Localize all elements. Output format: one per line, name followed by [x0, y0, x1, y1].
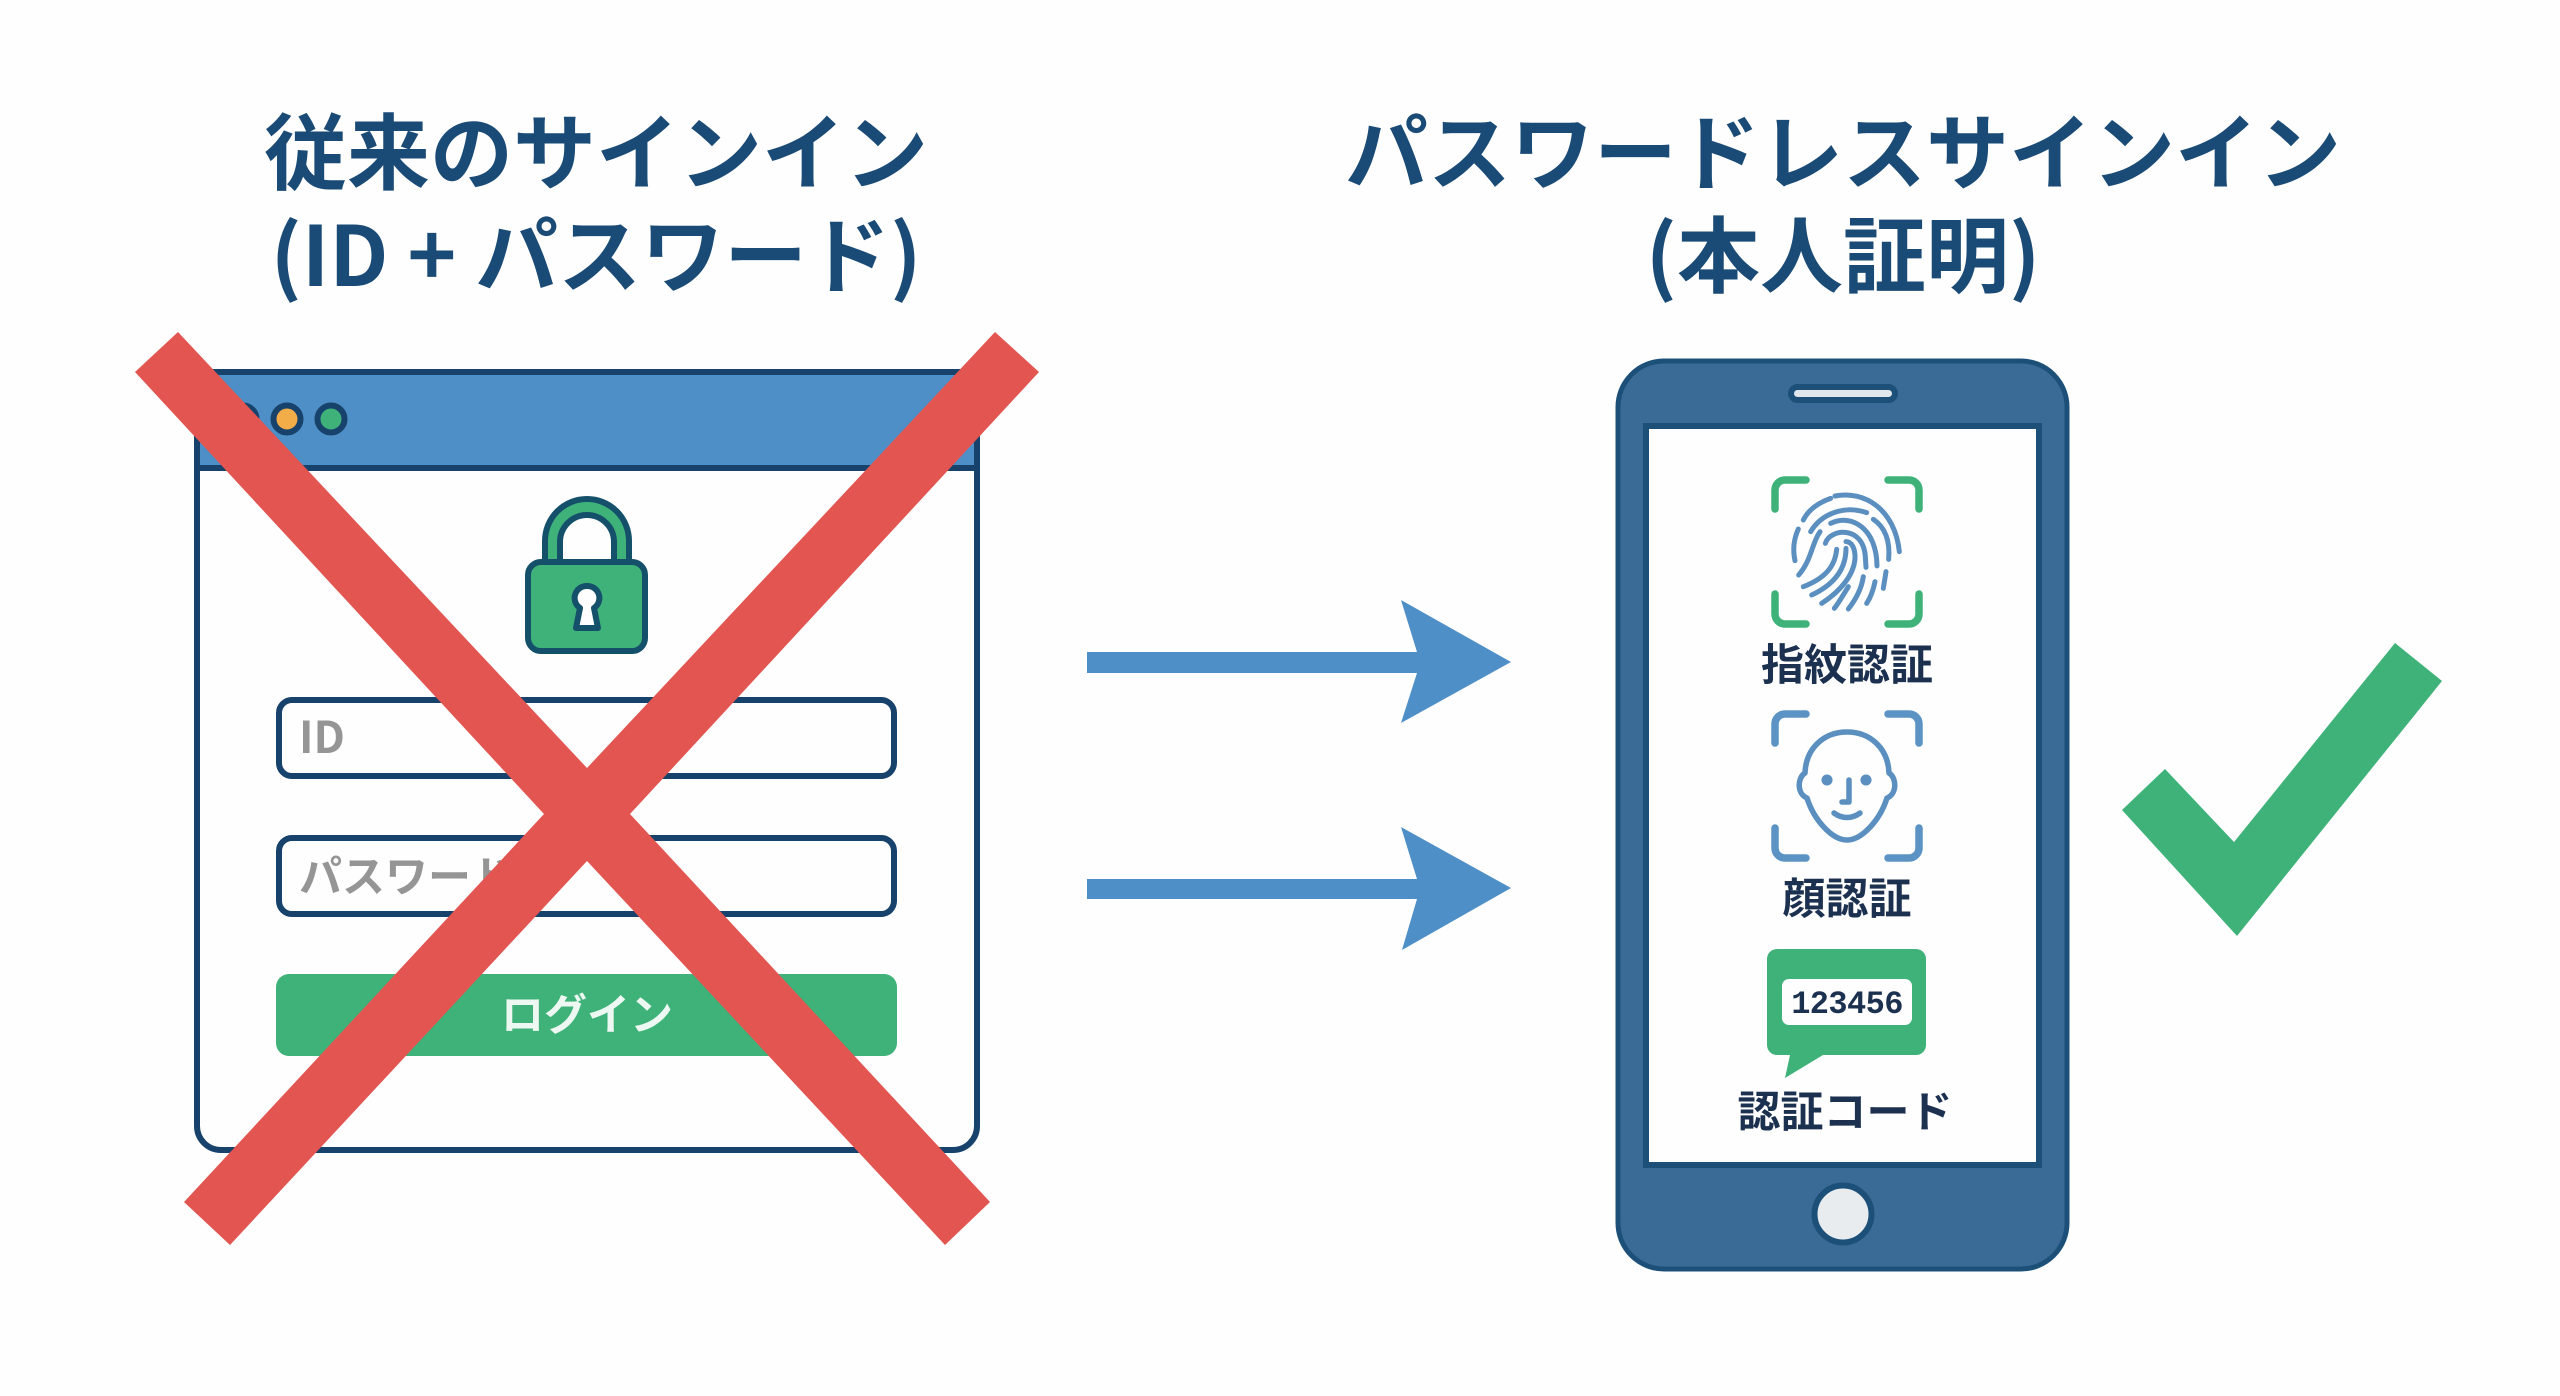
- input field: password: [279, 838, 894, 914]
- red cross over login window: [135, 332, 1039, 1245]
- face outline and features: [1799, 732, 1895, 840]
- icon: face scan: [1775, 714, 1919, 858]
- phone home button: [1814, 1186, 1872, 1242]
- input field: ID: [279, 700, 894, 776]
- heading: traditional sign-in: (ID + パスワード): [270, 190, 922, 310]
- input field: ID: ID: [299, 702, 345, 766]
- heading: passwordless sign-in: (本人証明): [1646, 190, 2040, 310]
- fingerprint ridges: [1794, 495, 1899, 609]
- label: fingerprint authentication: 指紋認証: [1761, 631, 1933, 693]
- icon: authentication code message: 123456: [1791, 986, 1903, 1023]
- login button: [276, 974, 897, 1056]
- label: face authentication: 顔認証: [1782, 865, 1912, 927]
- panel: browser login window: [197, 372, 977, 1150]
- icon: padlock: [528, 499, 645, 651]
- phone screen: [1646, 426, 2039, 1165]
- heading: traditional sign-in: 従来のサインイン: [264, 87, 928, 207]
- icon: fingerprint scan: [1775, 480, 1919, 624]
- green scan frame: [1775, 480, 1919, 624]
- heading: passwordless sign-in: [1345, 87, 2341, 310]
- icon: authentication code message: [1767, 949, 1926, 1078]
- heading: passwordless sign-in: パスワードレスサインイン: [1345, 87, 2341, 207]
- label: authentication code: 認証コード: [1738, 1078, 1952, 1140]
- blue scan frame: [1775, 714, 1919, 858]
- window control dots: [230, 406, 344, 432]
- window frame: [197, 372, 977, 1150]
- arrow: lower: [1087, 827, 1511, 950]
- phone body: [1618, 361, 2067, 1269]
- heading: traditional sign-in: [264, 87, 928, 310]
- panel: smartphone: [1618, 361, 2067, 1269]
- phone speaker: [1791, 387, 1895, 400]
- window title bar: [197, 372, 977, 468]
- login button: ログイン: [501, 981, 673, 1043]
- check mark: [2122, 643, 2442, 936]
- input field: password: パスワード: [299, 843, 514, 905]
- arrow: upper: [1087, 600, 1511, 723]
